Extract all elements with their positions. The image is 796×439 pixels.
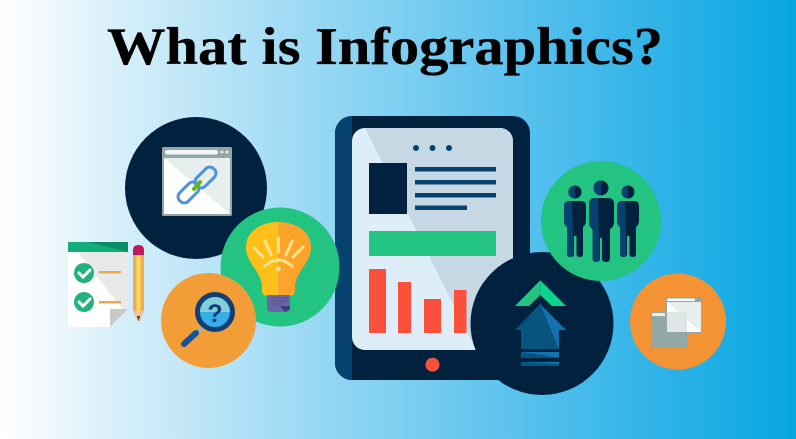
circle: people group (541, 161, 661, 281)
home button (426, 358, 440, 372)
icon: centre person (589, 180, 614, 262)
icon: magnifying glass: ? (207, 300, 223, 328)
icon: upward chevron (515, 280, 566, 306)
icon: pencil (133, 245, 144, 321)
bar chart (369, 269, 466, 333)
icon: lightbulb (246, 222, 311, 312)
circle: dark with upload arrow (470, 252, 614, 395)
circle: question magnifier (161, 273, 256, 368)
circle: link browser (125, 117, 267, 259)
icon: upward arrow (515, 304, 566, 366)
circle: overlapping windows (630, 274, 726, 370)
text lines (415, 167, 496, 210)
green banner (369, 231, 496, 256)
circle: idea lightbulb (220, 208, 340, 326)
icon: checklist note (68, 242, 128, 327)
icon: back window (651, 312, 687, 348)
icon: front window (666, 297, 702, 333)
icon: left person (564, 186, 586, 257)
title: What is Infographics? (107, 18, 663, 76)
check marks (74, 263, 94, 312)
tablet camera dots (413, 145, 452, 151)
image placeholder (369, 163, 407, 214)
checklist lines (99, 271, 121, 304)
icon: right person (617, 186, 639, 257)
icon: browser window with chain link (162, 147, 232, 216)
tablet (335, 116, 530, 380)
